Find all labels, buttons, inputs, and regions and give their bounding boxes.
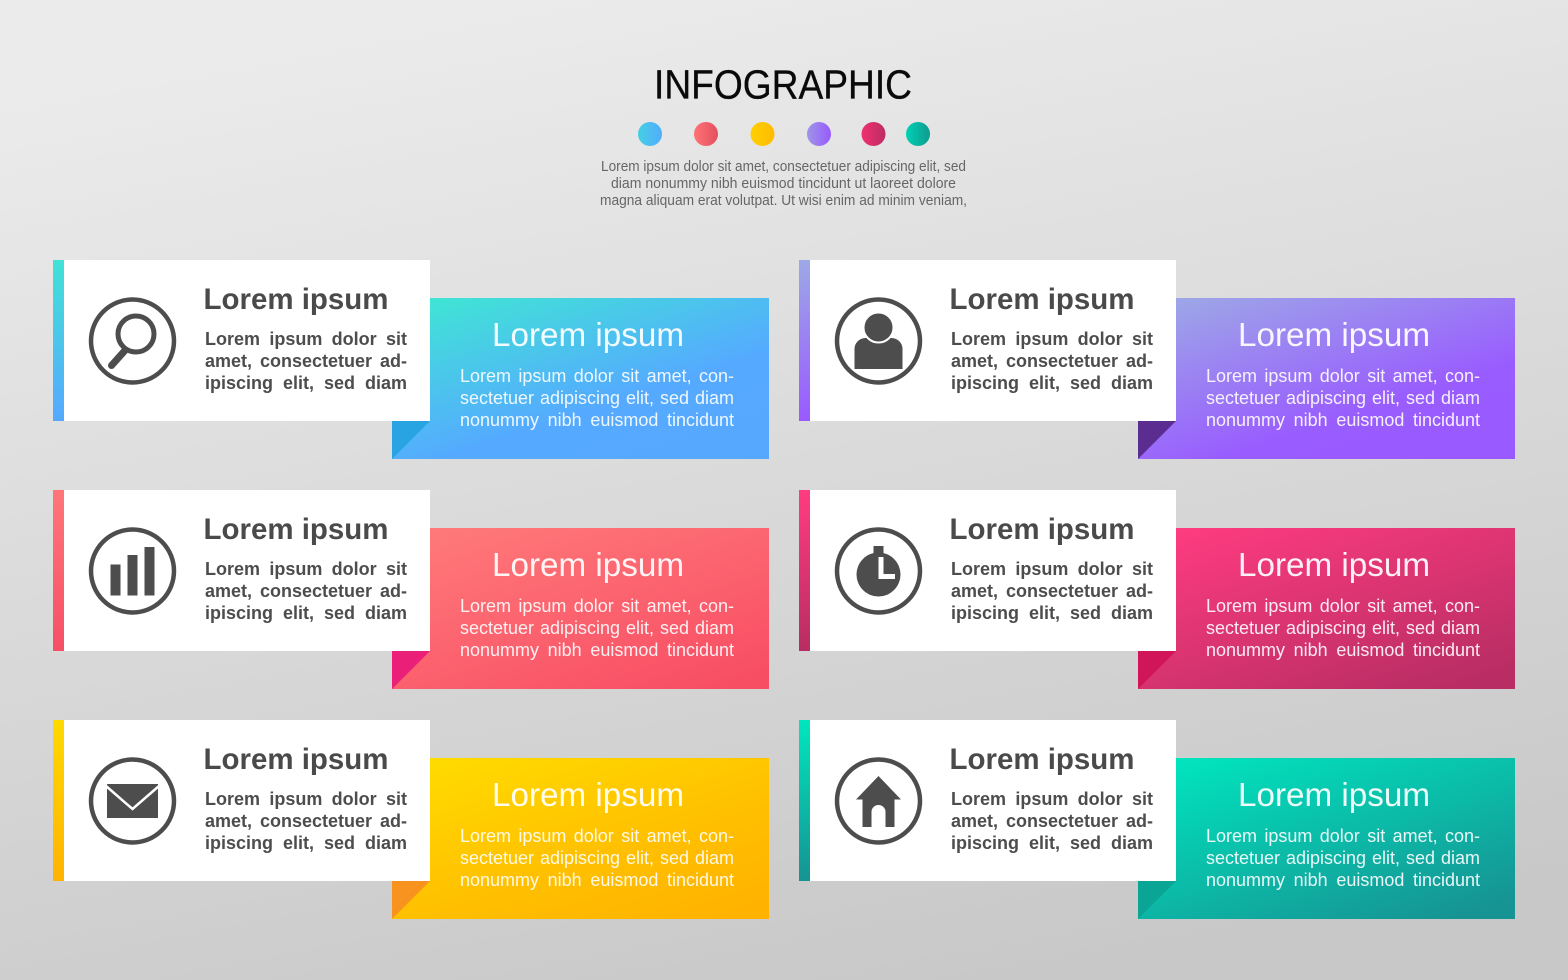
card heading: Lorem ipsum bbox=[204, 283, 388, 316]
card text: ipiscing elit, sed diam bbox=[951, 833, 1153, 853]
accent strip bbox=[53, 720, 64, 881]
colour panel bbox=[392, 298, 769, 459]
card text: ipiscing elit, sed diam bbox=[205, 603, 407, 623]
panel text: Lorem ipsum dolor sit amet, con- bbox=[460, 826, 734, 846]
fold bbox=[1138, 881, 1176, 919]
colour panel bbox=[1138, 528, 1515, 689]
icon: magnifier bbox=[91, 300, 174, 382]
card heading: Lorem ipsum bbox=[950, 513, 1134, 546]
panel text bbox=[1206, 826, 1480, 890]
accent strip bbox=[53, 260, 64, 421]
white card bbox=[64, 720, 430, 881]
panel text: sectetuer adipiscing elit, sed diam bbox=[460, 388, 734, 408]
panel text bbox=[1206, 596, 1480, 660]
panel: search item bbox=[53, 260, 769, 459]
white card bbox=[64, 490, 430, 651]
colour panel bbox=[1138, 298, 1515, 459]
colour dots bbox=[638, 122, 930, 146]
intro text: diam nonummy nibh euismod tincidunt ut laoreet dolore bbox=[611, 175, 956, 192]
panel heading: Lorem ipsum bbox=[492, 316, 684, 353]
card text: ipiscing elit, sed diam bbox=[205, 373, 407, 393]
accent strip bbox=[799, 260, 810, 421]
panel text: nonummy nibh euismod tincidunt bbox=[460, 410, 734, 430]
panel text: sectetuer adipiscing elit, sed diam bbox=[460, 618, 734, 638]
white card bbox=[810, 720, 1176, 881]
card text bbox=[951, 329, 1153, 393]
panel text: nonummy nibh euismod tincidunt bbox=[460, 640, 734, 660]
intro text: magna aliquam erat volutpat. Ut wisi enim ad minim veniam, bbox=[600, 192, 967, 209]
card text bbox=[951, 559, 1153, 623]
card text bbox=[205, 789, 407, 853]
panel text: nonummy nibh euismod tincidunt bbox=[1206, 410, 1480, 430]
panel heading: Lorem ipsum bbox=[1238, 546, 1430, 583]
panel: mail item bbox=[53, 720, 769, 919]
icon: stopwatch bbox=[837, 530, 920, 612]
fold bbox=[392, 651, 430, 689]
panel text: sectetuer adipiscing elit, sed diam bbox=[1206, 388, 1480, 408]
panel text bbox=[460, 366, 734, 430]
accent strip bbox=[799, 490, 810, 651]
card heading: Lorem ipsum bbox=[950, 743, 1134, 776]
icon: person bbox=[837, 300, 920, 382]
card text: amet, consectetuer ad- bbox=[205, 581, 407, 601]
card text: ipiscing elit, sed diam bbox=[951, 373, 1153, 393]
intro text bbox=[600, 158, 967, 209]
icon: envelope bbox=[91, 760, 174, 842]
card text: Lorem ipsum dolor sit bbox=[205, 789, 407, 809]
card heading: Lorem ipsum bbox=[204, 513, 388, 546]
panel text bbox=[460, 596, 734, 660]
panel heading: Lorem ipsum bbox=[492, 776, 684, 813]
panel heading: Lorem ipsum bbox=[1238, 776, 1430, 813]
panel text: Lorem ipsum dolor sit amet, con- bbox=[1206, 596, 1480, 616]
accent strip bbox=[799, 720, 810, 881]
card heading: Lorem ipsum bbox=[950, 283, 1134, 316]
fold bbox=[392, 421, 430, 459]
card text bbox=[205, 559, 407, 623]
panel text: sectetuer adipiscing elit, sed diam bbox=[1206, 848, 1480, 868]
white card bbox=[64, 260, 430, 421]
card text bbox=[951, 789, 1153, 853]
panel text: Lorem ipsum dolor sit amet, con- bbox=[1206, 826, 1480, 846]
card text: amet, consectetuer ad- bbox=[205, 811, 407, 831]
fold bbox=[1138, 651, 1176, 689]
panel text bbox=[1206, 366, 1480, 430]
fold bbox=[392, 881, 430, 919]
card text: Lorem ipsum dolor sit bbox=[205, 559, 407, 579]
panel text: Lorem ipsum dolor sit amet, con- bbox=[460, 596, 734, 616]
accent strip bbox=[53, 490, 64, 651]
panel text: nonummy nibh euismod tincidunt bbox=[1206, 640, 1480, 660]
card text: Lorem ipsum dolor sit bbox=[951, 789, 1153, 809]
fold bbox=[1138, 421, 1176, 459]
panel heading: Lorem ipsum bbox=[1238, 316, 1430, 353]
panel text: Lorem ipsum dolor sit amet, con- bbox=[460, 366, 734, 386]
white card bbox=[810, 260, 1176, 421]
panel text: Lorem ipsum dolor sit amet, con- bbox=[1206, 366, 1480, 386]
title: INFOGRAPHIC bbox=[654, 62, 912, 108]
panel text: nonummy nibh euismod tincidunt bbox=[460, 870, 734, 890]
panel text: nonummy nibh euismod tincidunt bbox=[1206, 870, 1480, 890]
panel: stopwatch item bbox=[799, 490, 1515, 689]
panel text bbox=[460, 826, 734, 890]
card text: amet, consectetuer ad- bbox=[951, 811, 1153, 831]
panel text: sectetuer adipiscing elit, sed diam bbox=[1206, 618, 1480, 638]
icon: bar chart bbox=[91, 530, 174, 612]
colour panel bbox=[392, 528, 769, 689]
card text: amet, consectetuer ad- bbox=[205, 351, 407, 371]
card text: ipiscing elit, sed diam bbox=[205, 833, 407, 853]
icon: house bbox=[837, 760, 920, 842]
panel text: sectetuer adipiscing elit, sed diam bbox=[460, 848, 734, 868]
card text: Lorem ipsum dolor sit bbox=[951, 559, 1153, 579]
colour panel bbox=[1138, 758, 1515, 919]
panel: chart item bbox=[53, 490, 769, 689]
intro text: Lorem ipsum dolor sit amet, consectetuer adipiscing elit, sed bbox=[601, 158, 966, 175]
white card bbox=[810, 490, 1176, 651]
panel: person item bbox=[799, 260, 1515, 459]
card text: Lorem ipsum dolor sit bbox=[205, 329, 407, 349]
panel heading: Lorem ipsum bbox=[492, 546, 684, 583]
card heading: Lorem ipsum bbox=[204, 743, 388, 776]
card text: amet, consectetuer ad- bbox=[951, 581, 1153, 601]
card text: ipiscing elit, sed diam bbox=[951, 603, 1153, 623]
panel: home item bbox=[799, 720, 1515, 919]
colour panel bbox=[392, 758, 769, 919]
card text: amet, consectetuer ad- bbox=[951, 351, 1153, 371]
card text bbox=[205, 329, 407, 393]
card text: Lorem ipsum dolor sit bbox=[951, 329, 1153, 349]
